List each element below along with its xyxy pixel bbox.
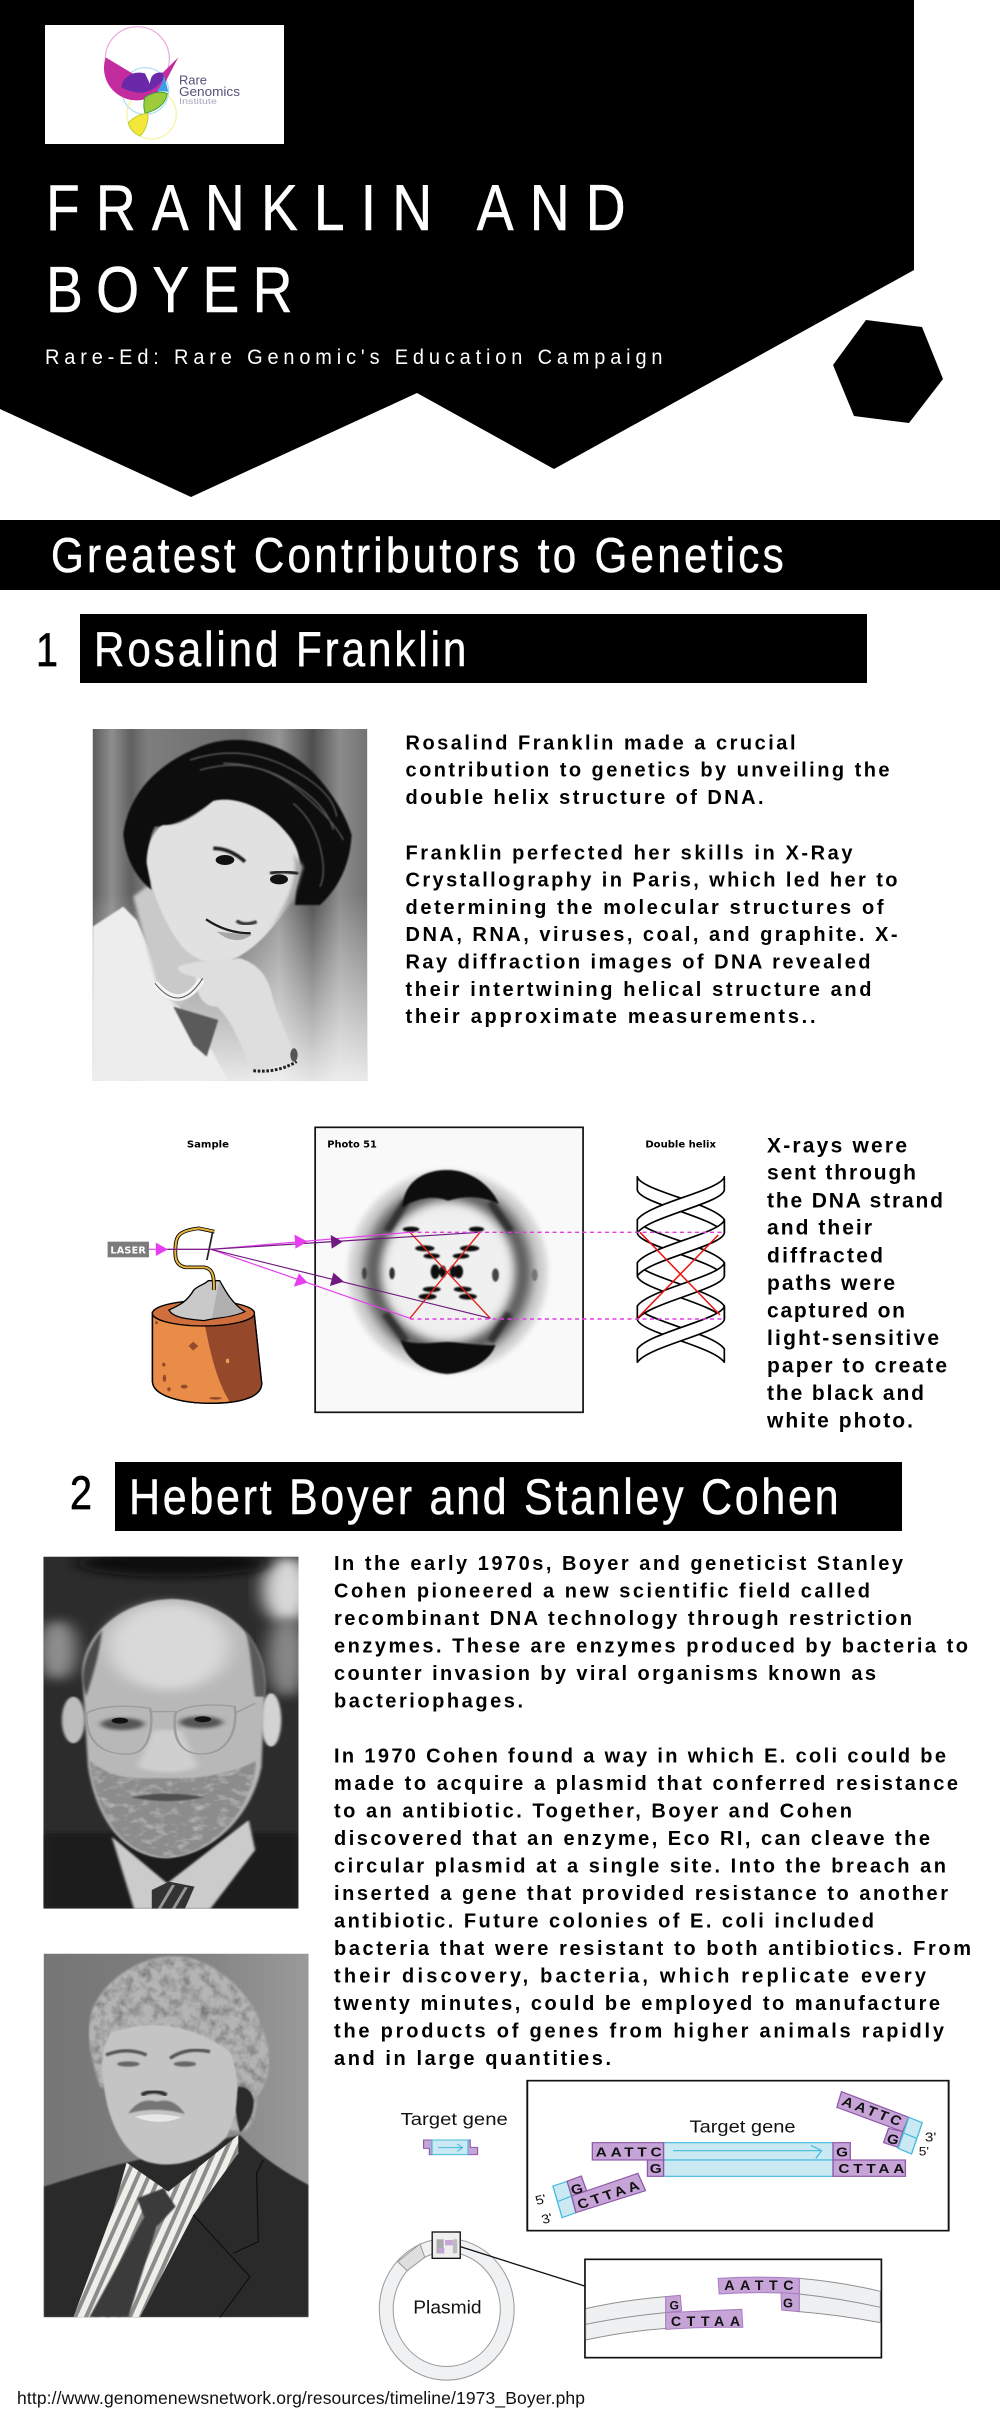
zoom square (432, 2232, 460, 2258)
plasmid ring (386, 2244, 507, 2373)
text: Franklin biography: their intertwining helical structure and (406, 979, 871, 1001)
text: Boyer and Cohen biography: recombinant DNA technology through restriction (334, 1608, 912, 1630)
sample holder wire (175, 1228, 214, 1290)
label: Photo 51: Photo 51 (327, 1139, 377, 1150)
text: Boyer and Cohen biography: discovered that an enzyme, Eco RI, can cleave the (334, 1828, 930, 1850)
photo: Rosalind Franklin (93, 729, 367, 1081)
text: X-ray explanation: the DNA strand (767, 1189, 943, 1212)
panel: gene inserted between sticky ends: CTTAA (838, 2162, 904, 2177)
text: Boyer and Cohen biography: enzymes. These are enzymes produced by bacteria to (334, 1635, 968, 1657)
heading: Rosalind Franklin (80, 614, 867, 683)
text: Boyer and Cohen biography: made to acquire a plasmid that conferred resistance (334, 1773, 958, 1795)
panel: cut plasmid close-up (585, 2259, 881, 2358)
panel: gene inserted between sticky ends: 3' (540, 2211, 554, 2227)
text: X-ray explanation: light-sensitive (767, 1327, 939, 1350)
cylinder stand (152, 1281, 262, 1403)
text: Franklin biography: their approximate measurements.. (406, 1006, 816, 1028)
icon: target gene: Target gene (401, 2109, 508, 2129)
section banner: greatest contributors (0, 520, 1000, 590)
diagram: plasmid cut by enzyme (386, 2232, 881, 2373)
text: Boyer and Cohen biography: antibiotic. Future colonies of E. coli included (334, 1911, 874, 1933)
connector line (460, 2247, 585, 2286)
text: Boyer and Cohen biography: bacteria that were resistant to both antibiotics. From (334, 1938, 971, 1960)
plasmid ring: Plasmid (413, 2296, 482, 2317)
panel: gene inserted between sticky ends: G (885, 2132, 901, 2149)
title: BOYER (46, 253, 293, 326)
source link: http://www.genomenewsnetwork.org/resources/timeline/1973_Boyer.php (17, 2388, 585, 2409)
text: Franklin biography: Ray diffraction images of DNA revealed (406, 952, 870, 974)
laser label: LASER (110, 1245, 147, 1256)
text: Franklin biography: contribution to genetics by unveiling the (406, 760, 890, 782)
logo: Rare Genomics Institute: Genomics (179, 84, 241, 99)
label: Sample: Sample (187, 1139, 229, 1150)
text: Franklin biography: Crystallography in Paris, which led her to (406, 870, 898, 892)
title (46, 171, 626, 326)
text: X-ray explanation: paper to create (767, 1354, 947, 1377)
subtitle: Rare-Ed: Rare Genomic's Education Campaign (45, 346, 662, 369)
panel: gene inserted between sticky ends: AATTC (839, 2094, 904, 2130)
text: X-ray explanation: diffracted (767, 1244, 883, 1267)
panel: gene inserted between sticky ends: 5' (534, 2192, 548, 2208)
text: X-ray explanation: and their (767, 1217, 872, 1240)
diagram: Photo 51 experiment (108, 1127, 724, 1412)
photo: man with curly hair (44, 1954, 309, 2317)
panel: cut plasmid close-up: CTTAA (671, 2313, 740, 2329)
title: FRANKLIN AND (46, 171, 626, 244)
dotted beams (410, 1232, 724, 1319)
text: Boyer and Cohen biography: In 1970 Cohen found a way in which E. coli could be (334, 1746, 946, 1768)
number 1: 1 (36, 625, 58, 677)
double helix (637, 1139, 724, 1362)
logo: Rare Genomics Institute (45, 25, 284, 144)
decorative hexagon (833, 320, 943, 423)
section banner: greatest contributors: Greatest Contributors to Genetics (51, 528, 784, 583)
panel: gene inserted between sticky ends: Target gene (690, 2117, 796, 2136)
diagram: target gene insertion (401, 2081, 949, 2231)
number 2: 2 (70, 1468, 92, 1520)
text: Franklin biography: Rosalind Franklin made a crucial (406, 732, 796, 754)
panel: gene inserted between sticky ends: 5' (919, 2144, 929, 2158)
panel: cut plasmid close-up: G (783, 2296, 793, 2311)
panel: diffraction photo (108, 1127, 583, 1412)
text: Boyer and Cohen biography: to an antibiotic. Together, Boyer and Cohen (334, 1801, 852, 1823)
text: Boyer and Cohen biography: twenty minutes, could be employed to manufacture (334, 1993, 940, 2015)
header banner (0, 0, 914, 497)
text: X-ray explanation: sent through (767, 1162, 916, 1185)
text: Boyer and Cohen biography: their discovery, bacteria, which replicate every (334, 1966, 927, 1988)
text: Boyer and Cohen biography: In the early 1970s, Boyer and geneticist Stanley (334, 1553, 904, 1575)
text: Boyer and Cohen biography: counter invasion by viral organisms known as (334, 1663, 876, 1685)
text: X-ray explanation: paths were (767, 1272, 895, 1295)
panel: gene inserted between sticky ends: G (650, 2162, 662, 2177)
panel: gene inserted between sticky ends: 3' (925, 2130, 937, 2145)
text: Boyer and Cohen biography: inserted a gene that provided resistance to another (334, 1883, 948, 1905)
text: Franklin biography: determining the molecular structures of (406, 897, 884, 919)
text: X-ray explanation: the black and (767, 1382, 924, 1405)
text: Boyer and Cohen biography: and in large quantities. (334, 2048, 611, 2070)
panel: gene inserted between sticky ends (527, 2081, 949, 2231)
heading: Hebert Boyer and Stanley Cohen: Hebert Boyer and Stanley Cohen (129, 1469, 838, 1525)
photo: bearded man with glasses (38, 1550, 311, 1909)
text: X-ray explanation: captured on (767, 1299, 905, 1322)
text: Boyer and Cohen biography: bacteriophages. (334, 1690, 523, 1712)
X pattern lines (410, 1232, 490, 1318)
logo: Rare Genomics Institute: Institute (179, 97, 218, 106)
text: Franklin biography (406, 732, 898, 1028)
text: Franklin biography: DNA, RNA, viruses, coal, and graphite. X- (406, 924, 898, 946)
heading: Rosalind Franklin: Rosalind Franklin (94, 622, 466, 677)
text: Franklin biography: double helix structure of DNA. (406, 787, 764, 809)
panel: gene inserted between sticky ends: CTTAA (575, 2179, 642, 2213)
panel: gene inserted between sticky ends: G (836, 2146, 848, 2160)
logo: Rare Genomics Institute: Rare (179, 73, 207, 88)
text: X-ray explanation (766, 1134, 947, 1432)
text: Boyer and Cohen biography: the products of genes from higher animals rapidly (334, 2020, 945, 2042)
panel: gene inserted between sticky ends: G (569, 2182, 585, 2198)
text: Boyer and Cohen biography: Cohen pioneered a new scientific field called (334, 1580, 870, 1602)
text: Boyer and Cohen biography (334, 1553, 971, 2070)
text: X-ray explanation: X-rays were (767, 1134, 907, 1157)
panel: gene inserted between sticky ends: AATTC (596, 2146, 662, 2160)
rays (149, 1232, 490, 1318)
label: Double helix: Double helix (645, 1139, 717, 1150)
icon: target gene (401, 2109, 508, 2155)
text: Boyer and Cohen biography: circular plasmid at a single site. Into the breach an (334, 1856, 946, 1878)
text: Franklin biography: Franklin perfected her skills in X-Ray (406, 842, 853, 864)
panel: cut plasmid close-up: G (669, 2298, 679, 2312)
panel: cut plasmid close-up: AATTC (724, 2277, 794, 2293)
laser label (108, 1242, 149, 1257)
text: X-ray explanation: white photo. (766, 1409, 913, 1432)
